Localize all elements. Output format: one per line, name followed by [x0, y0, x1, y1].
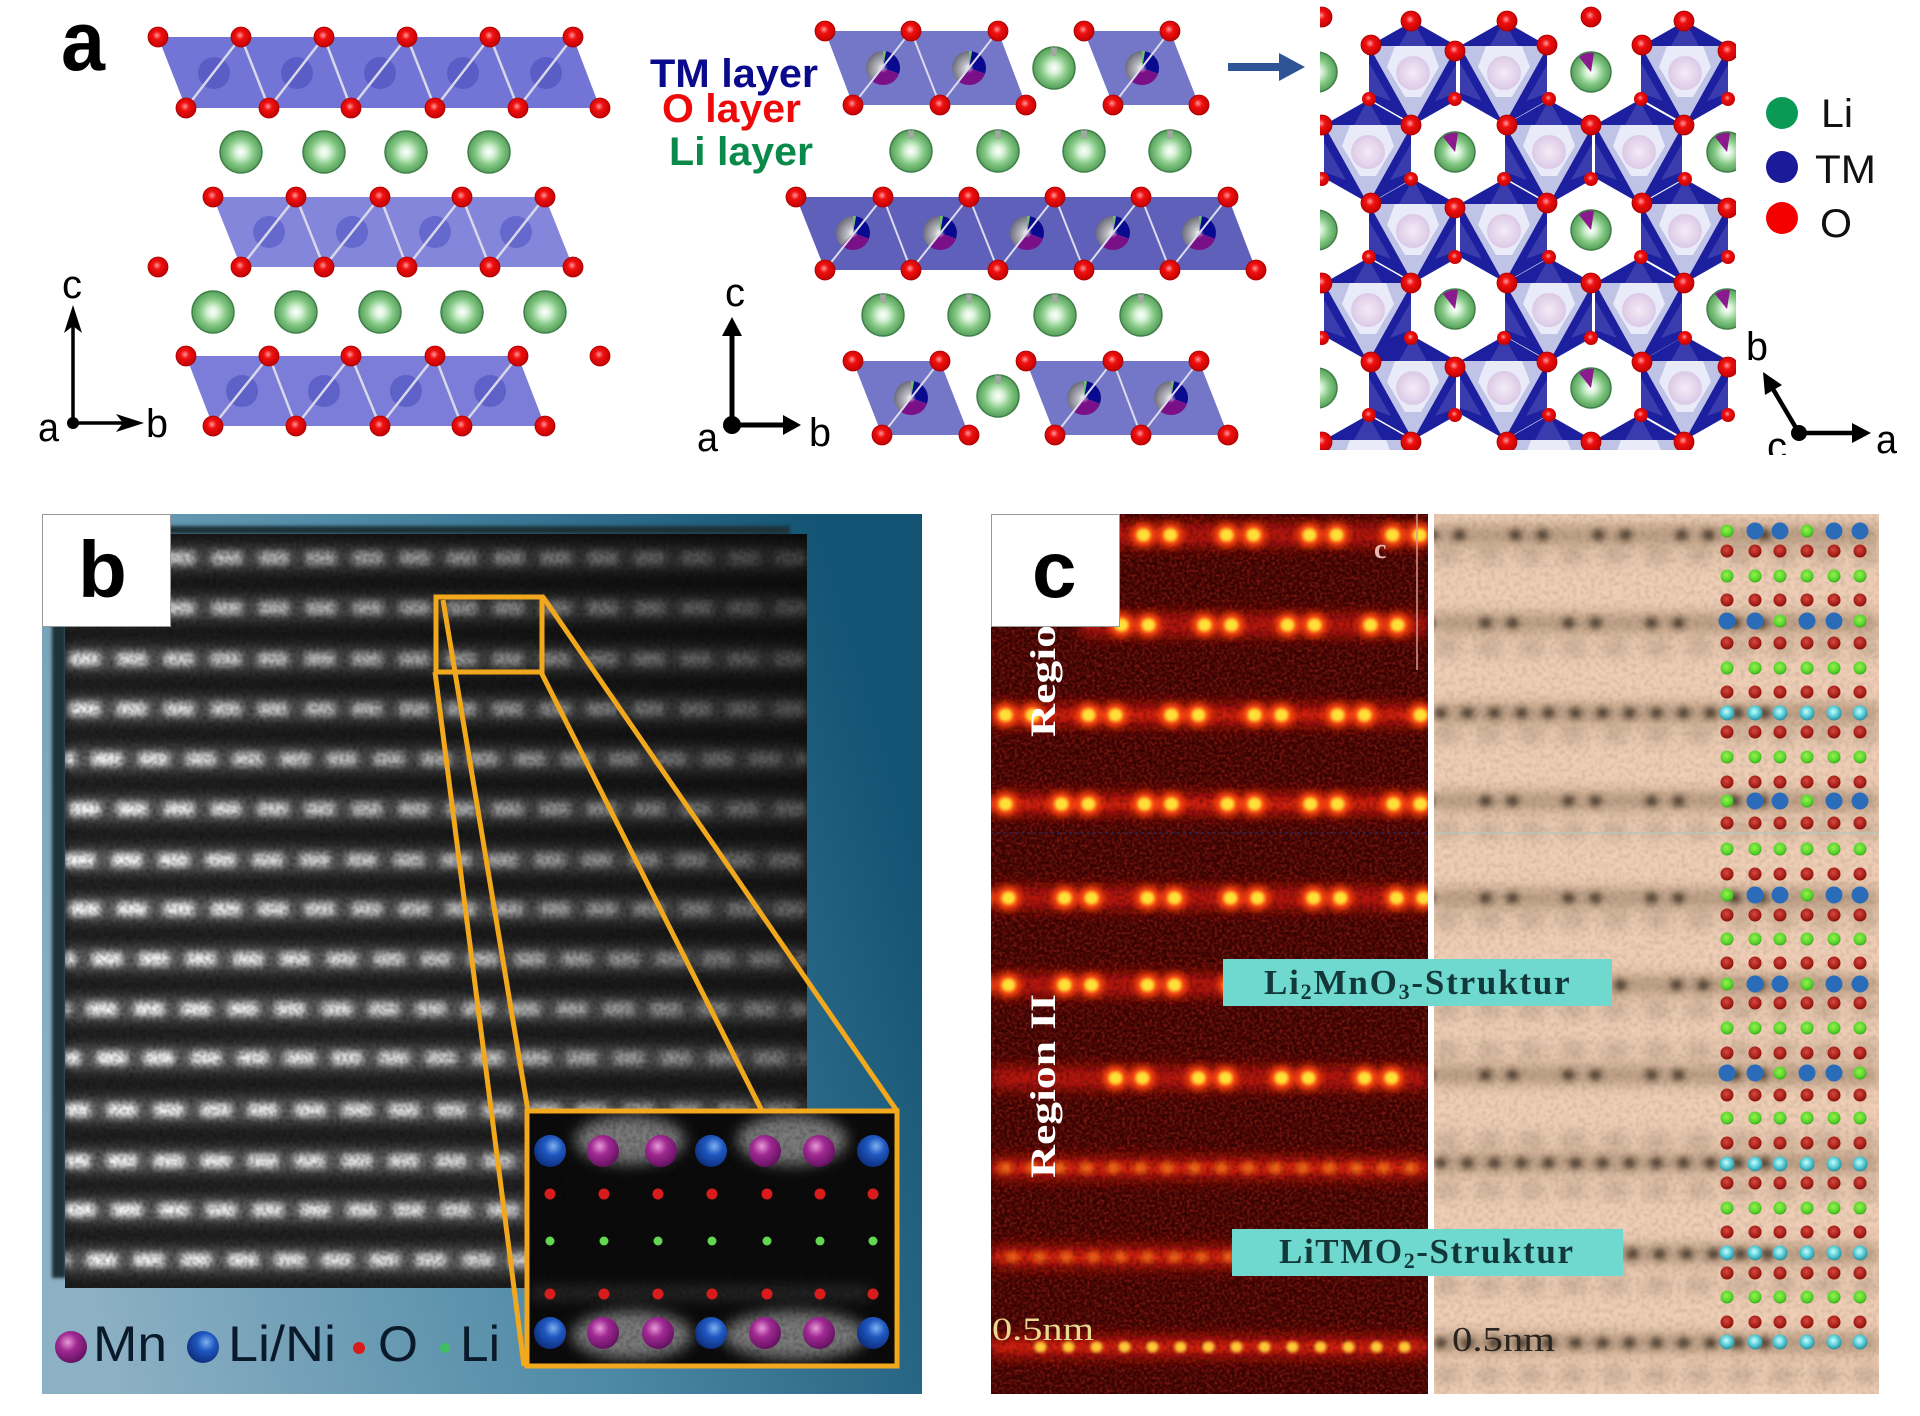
- legend: atom colours: TM: [1815, 148, 1876, 192]
- zoom indicator: orange box and projection lines: [435, 597, 897, 1366]
- axes: left view: a: [38, 406, 60, 450]
- polyhedra honeycomb units: [1324, 24, 1728, 450]
- scale label: red image: 0.5nm: [992, 1312, 1094, 1348]
- callout: Li2MnO3 structure: -Struktur: [1411, 963, 1572, 1002]
- STEM image with atomic rows: [65, 534, 807, 1288]
- dark atom columns: [1402, 535, 1780, 1343]
- polyhedra layer 1: [148, 27, 610, 118]
- legend: atom colours: O: [1820, 202, 1852, 246]
- white divider: [1428, 514, 1434, 1394]
- raw contrast image: [1402, 514, 1879, 1394]
- axes: top-down view: [1748, 331, 1897, 455]
- polyhedra bottom layer: [843, 351, 1238, 445]
- polyhedra layer 3: [176, 346, 610, 436]
- panel background: [42, 514, 922, 1394]
- axes: top-down view: a: [1876, 418, 1898, 462]
- lithium row lower: [862, 294, 1162, 336]
- legend: element key: Mn: [93, 1316, 167, 1372]
- panel b: atomic-resolution STEM image: [42, 514, 922, 1394]
- legend: atom colours: [1766, 92, 1876, 246]
- axes: left view: c: [62, 263, 82, 307]
- oxygen sites: [1312, 7, 1738, 452]
- callout: Li2MnO3 structure: [1223, 959, 1612, 1006]
- polyhedra middle layer: [786, 187, 1266, 280]
- structure: middle layered view with mixed TM atoms: [786, 21, 1266, 445]
- layer legend text: [650, 52, 818, 174]
- panel c: colour-mapped and raw microscopy with structure overlay: [978, 514, 1879, 1394]
- legend: element key: [55, 1316, 500, 1372]
- axes: middle view: c: [725, 271, 745, 315]
- lithium sites: [1297, 52, 1747, 408]
- axes: top-down view: c: [1767, 425, 1787, 469]
- axes: left view: b: [146, 402, 168, 446]
- inset: magnified lattice with atoms: [527, 1111, 897, 1366]
- axes: top-down view: b: [1746, 325, 1768, 369]
- layer legend text: TM layer: [650, 52, 818, 96]
- bright atom columns: [978, 535, 1428, 1078]
- axes: middle view: a: [697, 416, 719, 460]
- scale label: raw image: 0.5nm: [1452, 1320, 1555, 1359]
- lithium row 1: [220, 131, 510, 173]
- legend: element key: Li/Ni: [228, 1316, 336, 1372]
- callout: Li2MnO3 structure: MnO: [1313, 963, 1399, 1002]
- legend: element key: O: [378, 1316, 418, 1372]
- red intensity-map image: [978, 514, 1428, 1394]
- callout: Li2MnO3 structure: 2: [1301, 979, 1313, 1004]
- panel label c: [992, 514, 1120, 626]
- brown halo around atom columns: [1434, 535, 1879, 1343]
- inset atoms: top TM row: [534, 1135, 889, 1167]
- panel label c: c: [1032, 525, 1076, 614]
- callout: LiTMO2 structure: -Struktur: [1416, 1232, 1575, 1271]
- arrow: to top-down view: [1228, 53, 1305, 81]
- inset atoms: bottom TM row: [534, 1317, 889, 1349]
- legend: atom colours: Li: [1821, 92, 1853, 136]
- callout: LiTMO2 structure: 2: [1404, 1248, 1416, 1273]
- callout: LiTMO2 structure: [1232, 1229, 1623, 1276]
- lithium row upper: [890, 130, 1191, 172]
- red glow bands: [991, 535, 1428, 1347]
- axes: left view: [38, 263, 168, 450]
- image drop shadow: [52, 526, 790, 1278]
- callout: LiTMO2 structure: LiTMO: [1279, 1232, 1404, 1271]
- faint secondary atom rows: [1434, 556, 1879, 1375]
- axes: middle view: b: [809, 411, 831, 455]
- region label: upper: Regio: [1023, 625, 1063, 737]
- panel label b: b: [78, 525, 127, 614]
- polyhedra top layer: [815, 21, 1209, 115]
- structure overlay: atom grid: [1718, 522, 1868, 1350]
- panel a: crystal structure views: [40, 6, 1897, 455]
- legend: element key: Li: [460, 1316, 500, 1372]
- structure: left layered view: [148, 27, 610, 436]
- callout: Li2MnO3 structure: 3: [1399, 979, 1411, 1004]
- panel label b: [42, 514, 170, 626]
- callout: Li2MnO3 structure: Li: [1264, 963, 1301, 1002]
- axes: middle view: [697, 271, 831, 460]
- layer legend text: Li layer: [669, 130, 813, 174]
- layer legend text: O layer: [662, 87, 801, 131]
- inset atoms: oxygen and lithium rows: [544, 1188, 878, 1300]
- region label: lower: Region II: [1023, 994, 1063, 1178]
- lithium row 2: [192, 291, 566, 333]
- polyhedra layer 2: [148, 187, 583, 277]
- structure: top-down honeycomb view: [1320, 6, 1736, 450]
- red intensity-map image: c: [1374, 534, 1386, 565]
